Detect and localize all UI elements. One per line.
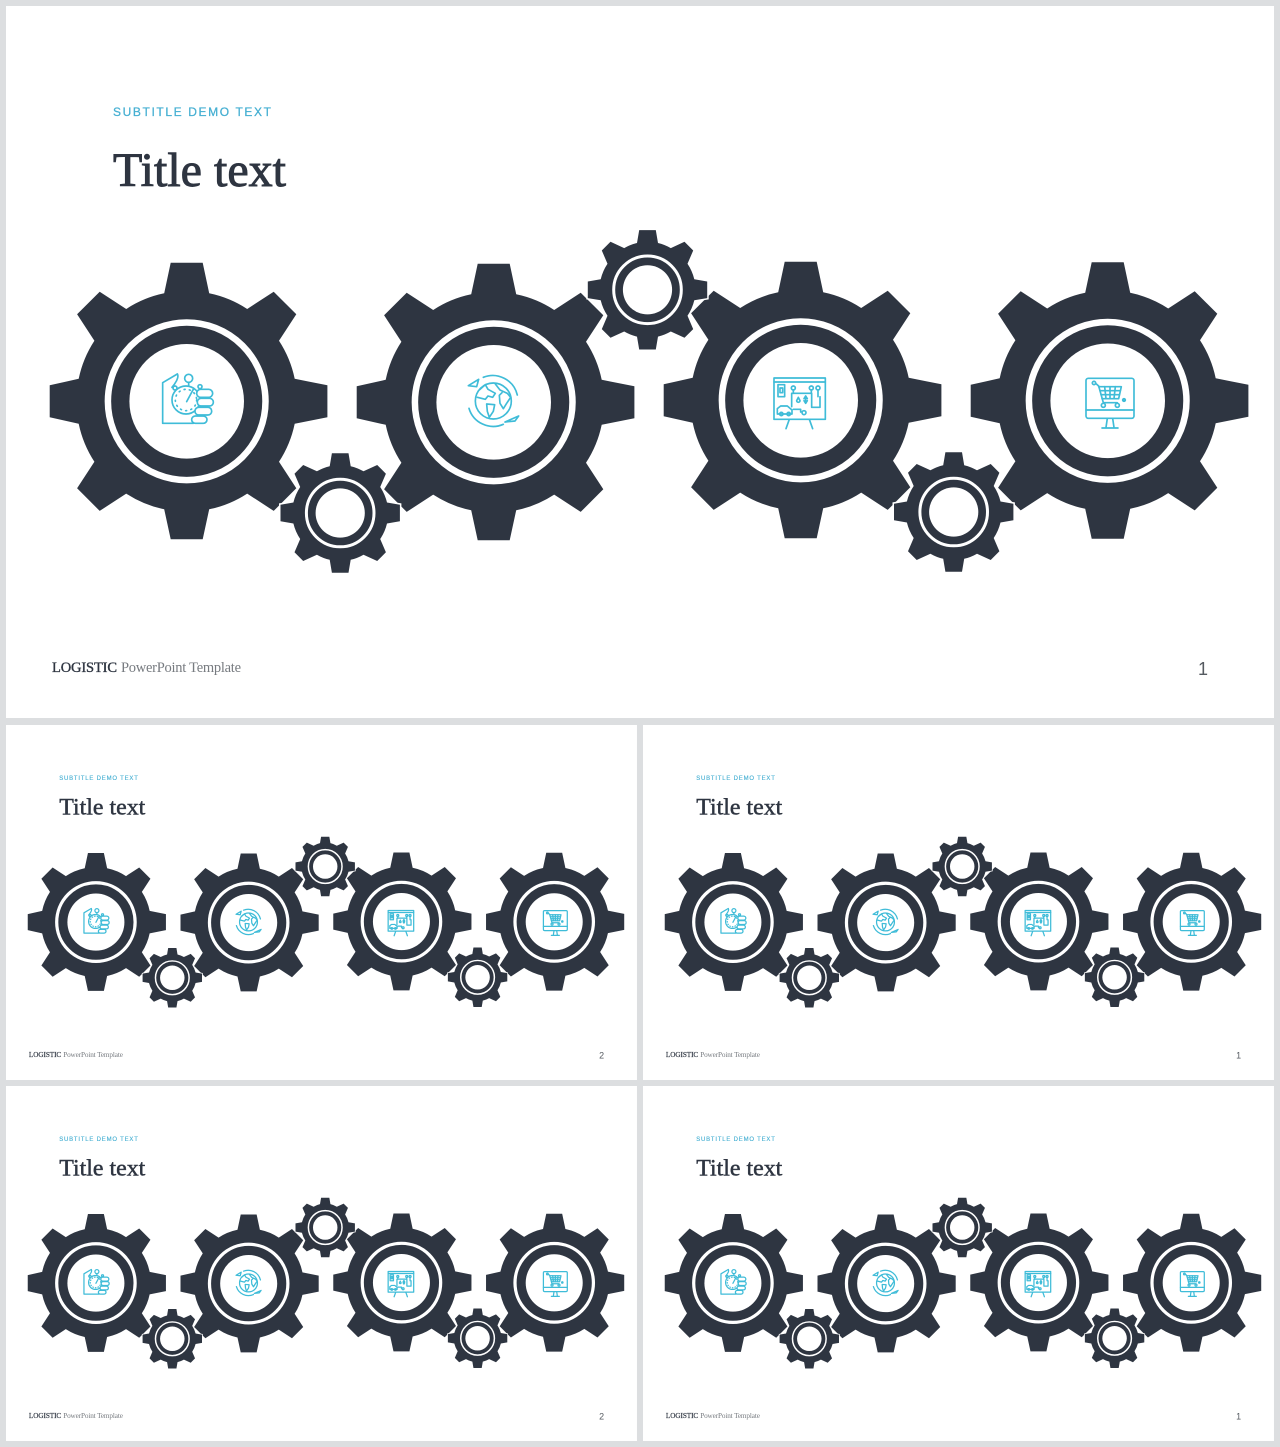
footer label: LOGISTIC [29, 1051, 61, 1059]
panel: slide background [6, 725, 637, 1080]
large gears with icons [665, 1213, 1261, 1352]
slide 2: small top left [6, 725, 637, 1080]
small gear top centre [588, 230, 707, 350]
slide 3: small top right [643, 725, 1274, 1080]
large gears with icons [28, 852, 624, 991]
page number: 2 [599, 1412, 604, 1422]
small gear lower left [280, 453, 400, 573]
small gears [780, 837, 1144, 1008]
subtitle: SUBTITLE DEMO TEXT [113, 105, 272, 119]
footer label: LOGISTIC [666, 1412, 698, 1420]
footer label: LOGISTIC [666, 1051, 698, 1059]
footer label: LOGISTIC [52, 660, 117, 676]
footer label: PowerPoint Template [700, 1051, 760, 1059]
footer label: PowerPoint Template [63, 1412, 123, 1420]
subtitle: SUBTITLE DEMO TEXT [59, 776, 138, 782]
panel: slide background [6, 1086, 637, 1441]
subtitle: SUBTITLE DEMO TEXT [696, 776, 775, 782]
panel: slide background [643, 725, 1274, 1080]
slide 5: small bottom right [643, 1086, 1274, 1441]
title: Title text [59, 1156, 146, 1182]
page number: 1 [1236, 1412, 1241, 1422]
page number: 1 [1198, 659, 1208, 679]
large gear 2 with globe icon [357, 264, 634, 540]
subtitle: SUBTITLE DEMO TEXT [696, 1137, 775, 1143]
title: Title text [696, 1156, 783, 1182]
footer label: LOGISTIC [29, 1412, 61, 1420]
footer label: PowerPoint Template [63, 1051, 123, 1059]
large gears with icons [28, 1213, 624, 1352]
footer label: PowerPoint Template [121, 660, 241, 676]
page number: 1 [1236, 1051, 1241, 1061]
title: Title text [113, 145, 286, 197]
subtitle: SUBTITLE DEMO TEXT [59, 1137, 138, 1143]
slide 4: small bottom left [6, 1086, 637, 1441]
large gear 3 with route board icon [664, 262, 941, 538]
small gears [780, 1198, 1144, 1369]
slide 1: large [6, 6, 1274, 718]
page number: 2 [599, 1051, 604, 1061]
small gears [143, 837, 507, 1008]
panel: slide background [643, 1086, 1274, 1441]
panel: slide background [6, 6, 1274, 718]
footer label: PowerPoint Template [700, 1412, 760, 1420]
title: Title text [696, 795, 783, 821]
large gears with icons [665, 852, 1261, 991]
small gears [143, 1198, 507, 1369]
large gear 1 with stopwatch icon [50, 263, 327, 539]
title: Title text [59, 795, 146, 821]
small gear lower right [894, 452, 1013, 572]
large gear 4 with shopping cart monitor icon [971, 262, 1248, 539]
